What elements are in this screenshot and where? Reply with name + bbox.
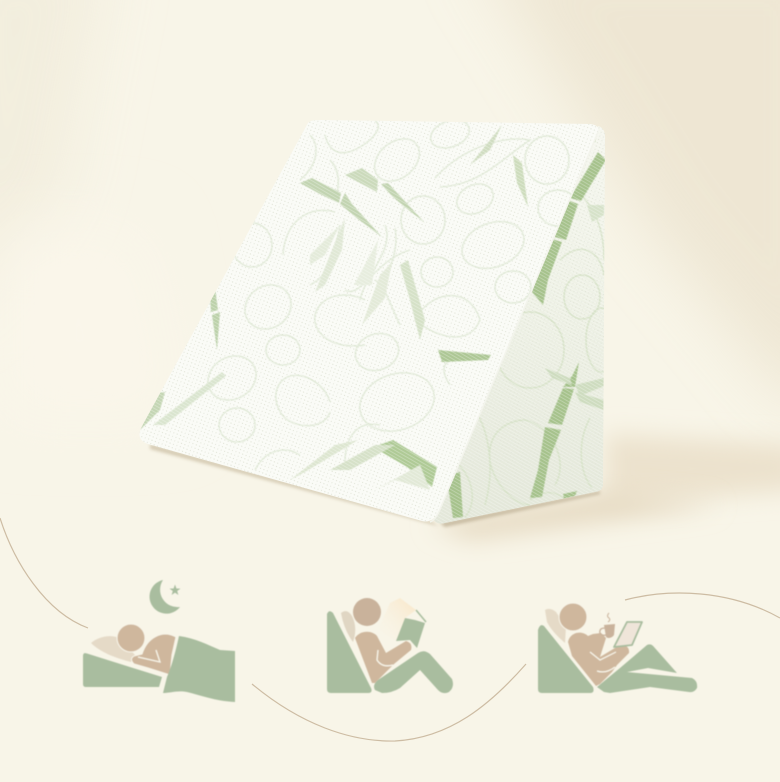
- head: [559, 603, 587, 631]
- wedge: [327, 611, 372, 693]
- head: [353, 598, 381, 626]
- pillow shadow: [150, 434, 780, 540]
- legs: [374, 651, 453, 693]
- wedge pillow: [130, 115, 618, 530]
- body: [132, 634, 176, 675]
- body: [355, 632, 411, 683]
- body: [568, 633, 629, 686]
- decorative connecting line: [0, 518, 780, 741]
- icon: reading a book: [327, 598, 453, 693]
- head: [117, 624, 145, 652]
- bamboo leaf pattern: [140, 125, 528, 490]
- legs: [597, 644, 697, 693]
- pillow side face: [434, 126, 605, 524]
- pillow: [545, 609, 566, 643]
- quilted circle pattern: [200, 115, 578, 470]
- wedge: [83, 653, 162, 687]
- blanket: [163, 636, 235, 702]
- tablet: [614, 622, 642, 647]
- icon: sleeping on wedge: [83, 580, 235, 702]
- seam between faces: [430, 132, 598, 522]
- wedge: [538, 625, 594, 693]
- pillow front face: [130, 115, 610, 530]
- side bamboo stalks: [438, 126, 606, 518]
- pillow: [91, 636, 135, 662]
- light glow: [378, 598, 416, 641]
- coffee cup: [600, 613, 615, 638]
- moon and star: [150, 580, 180, 614]
- book: [396, 610, 426, 648]
- side quilted circles: [459, 197, 604, 517]
- icon: relaxing with tablet and coffee: [538, 603, 697, 693]
- pillow: [341, 611, 355, 642]
